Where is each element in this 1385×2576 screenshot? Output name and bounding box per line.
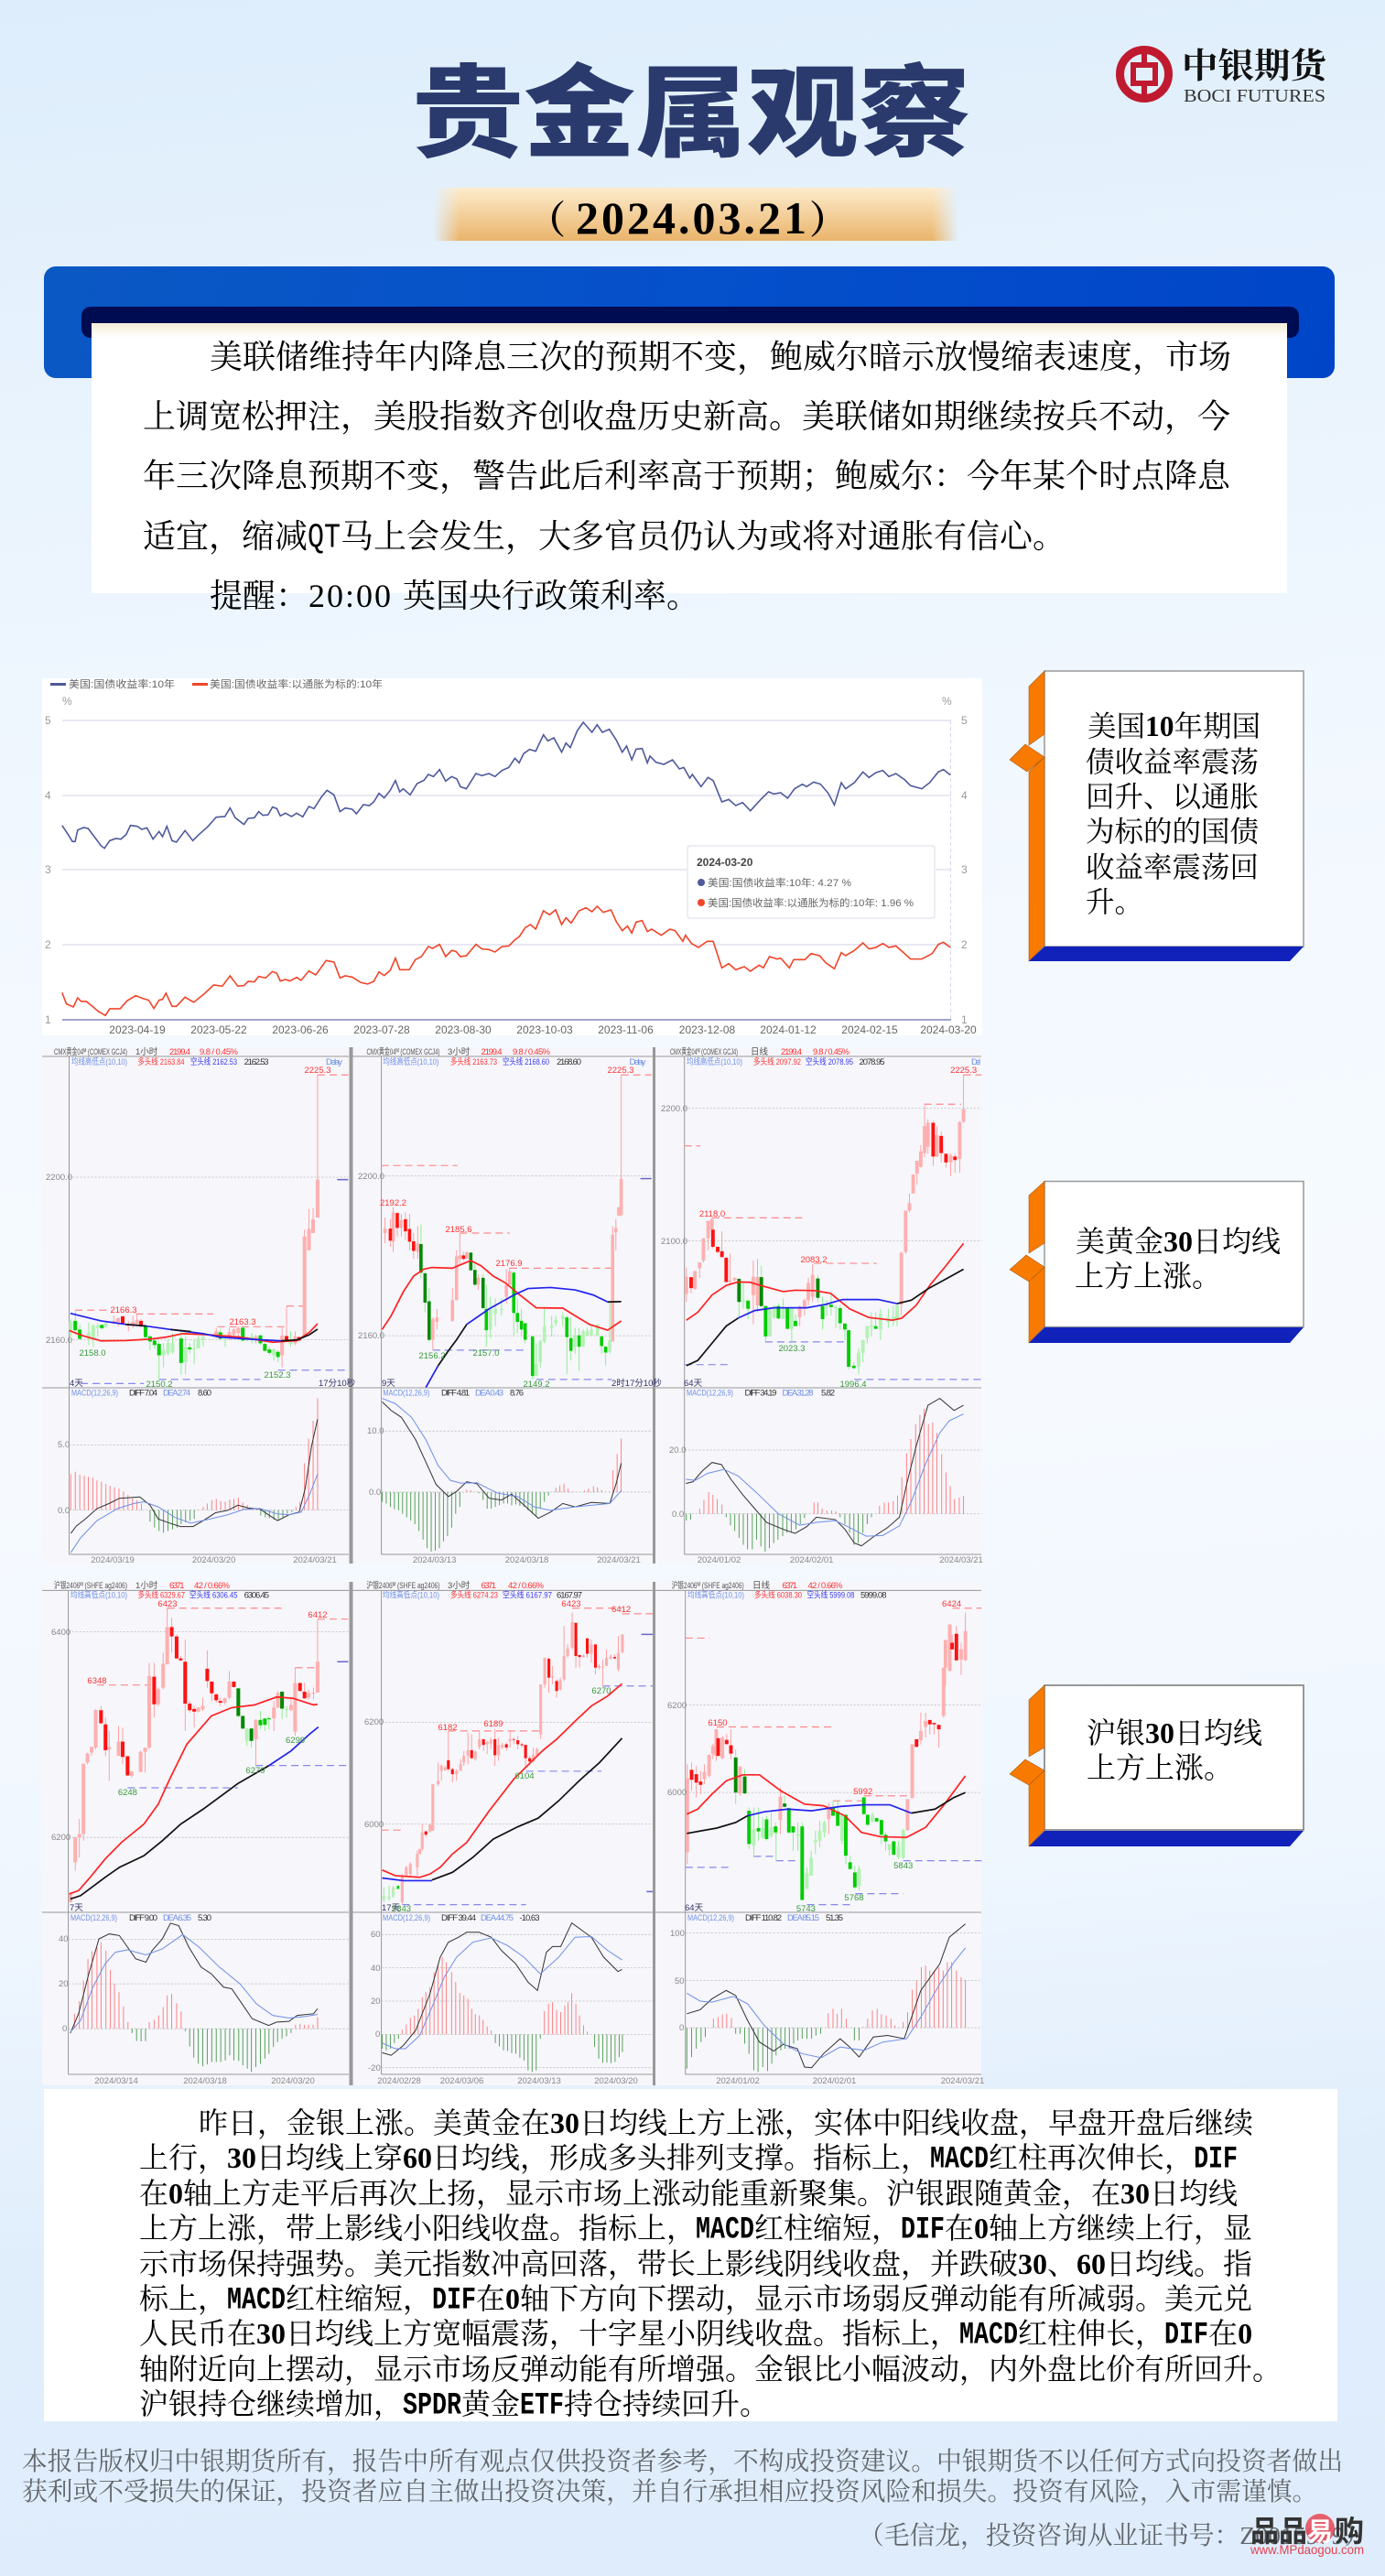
chart: gold 1 hour: 空头线 2162.53: [190, 1056, 237, 1067]
chart: gold 3 hour: 2024/03/18: [505, 1555, 548, 1565]
chart: gold 1 hour: 2024/03/19: [91, 1555, 135, 1565]
chart: gold 1 hour: 1小时: [135, 1046, 158, 1057]
chart: gold daily: DIFF 34.19: [745, 1388, 776, 1399]
summary text: 上调宽松押注，美股指数齐创收盘历史新高。美联储如期继续按兵不动，今: [143, 398, 1230, 435]
chart: gold daily: 5.82: [821, 1388, 835, 1399]
chart: silver 3 hour: [364, 1580, 653, 2086]
chart: gold 1 hour: 2200.0: [46, 1173, 72, 1183]
callout: gold: 美黄金30日均线: [1076, 1225, 1281, 1258]
summary text: 美联储维持年内降息三次的预期不变，鲍威尔暗示放慢缩表速度，市场: [210, 339, 1231, 375]
analysis text: MACD: [959, 2319, 1018, 2354]
chart: gold 3 hour: 2192.2: [380, 1198, 406, 1208]
chart: silver 3 hour: 3小时: [448, 1580, 471, 1591]
callout: silver: 沪银30日均线: [1087, 1716, 1262, 1749]
chart: gold 1 hour: 2160.0: [46, 1336, 72, 1346]
analysis text: DIF: [901, 2213, 945, 2248]
chart: gold 3 hour: MACD(12,26,9): [383, 1388, 429, 1399]
chart: gold 1 hour: 多头线 2163.84: [137, 1056, 185, 1067]
chart: gold daily: 2078.95: [859, 1057, 884, 1067]
chart: US treasury yields: 2024-03-20: [920, 1023, 977, 1036]
chart: silver daily: 6000: [667, 1788, 687, 1798]
chart: silver 1 hour: 沪银2406ᴹ (SHFE ag2406): [54, 1580, 127, 1591]
chart: US treasury yields: %: [942, 695, 952, 708]
chart: silver 3 hour: 6412: [611, 1605, 631, 1615]
chart: gold daily: 均线高低点(10,10): [687, 1056, 742, 1067]
chart: gold 3 hour: 2024/03/13: [413, 1555, 456, 1565]
chart: silver 3 hour: DEA 44.75: [481, 1913, 514, 1923]
chart: silver 1 hour: 2024/03/18: [183, 2076, 227, 2086]
chart row background: silver: [42, 1582, 981, 2085]
chart: gold daily: 2225.3: [950, 1066, 977, 1076]
chart: US treasury yields: [42, 677, 982, 1036]
paper panel: [92, 323, 1287, 593]
chart: silver daily: 64天: [685, 1903, 704, 1913]
chart: silver 3 hour: 空头线 6167.97: [503, 1589, 552, 1600]
chart: silver 1 hour: 多头线 6329.67: [137, 1589, 185, 1600]
chart: US treasury yields: 美国:国债收益率:10年: [69, 677, 175, 690]
chart: gold 3 hour: 2225.3: [607, 1066, 634, 1076]
chart: gold 3 hour: 10.0: [367, 1426, 384, 1436]
chart: silver 1 hour: 1小时: [135, 1580, 158, 1591]
chart: silver daily: MACD(12,26,9): [687, 1913, 734, 1923]
chart: gold 3 hour: 2168.60: [557, 1057, 581, 1067]
chart: US treasury yields: 5: [961, 714, 968, 727]
chart: gold 3 hour: [358, 1046, 662, 1565]
callout: silver: 上方上涨。: [1087, 1751, 1233, 1784]
chart: US treasury yields: 2: [961, 938, 968, 951]
chart: silver daily: 42 / 0.66%: [807, 1581, 843, 1591]
chart: silver daily: 5992: [853, 1787, 872, 1797]
chart: silver 3 hour: 40: [371, 1964, 381, 1974]
chart: silver 1 hour: DEA 6.35: [163, 1913, 191, 1923]
header band: [44, 266, 1335, 378]
chart: gold daily: 2118.0: [699, 1209, 725, 1219]
chart: silver 3 hour: 6104: [514, 1771, 535, 1781]
chart: gold daily: CMX黄金04ᴹ (COMEX GCJ4): [670, 1046, 738, 1057]
chart: silver daily: 6371: [782, 1581, 797, 1591]
chart: silver daily: [667, 1580, 984, 2086]
chart: silver 3 hour: 6423: [561, 1599, 581, 1609]
analysis text: DIF: [1164, 2319, 1208, 2354]
chart: gold 3 hour: Delay: [630, 1057, 646, 1067]
chart: gold 1 hour: CMX黄金04ᴹ (COMEX GCJ4): [54, 1046, 127, 1057]
chart: silver 3 hour: 2024/03/06: [440, 2076, 483, 2086]
chart: US treasury yields: 3: [45, 863, 51, 876]
watermark: [1250, 2514, 1364, 2557]
chart: gold daily: [661, 1046, 983, 1565]
chart: gold 3 hour: 空头线 2168.60: [503, 1056, 549, 1067]
chart: silver daily: 多头线 6038.30: [754, 1589, 802, 1600]
summary text: 适宜，缩减 马上会发生，大多官员仍认为或将对通胀有信心。: [143, 518, 1066, 555]
chart: gold 3 hour: 2156.2: [418, 1351, 446, 1361]
chart: gold daily: 0.0: [672, 1510, 684, 1520]
chart: gold daily: 9.8 / 0.45%: [813, 1047, 850, 1057]
chart: silver 3 hour: 2024/03/13: [517, 2076, 561, 2086]
chart: gold 3 hour: 2157.0: [472, 1348, 500, 1358]
chart: US treasury yields: 2023-10-03: [516, 1023, 573, 1036]
analysis text: MACD: [696, 2213, 754, 2248]
chart: silver 3 hour: 6182: [438, 1723, 458, 1733]
analysis text: 轴附近向上摆动，显示市场反弹动能有所增强。金银比小幅波动，内外盘比价有所回升。: [139, 2353, 1282, 2386]
chart: silver 3 hour: -10.63: [520, 1913, 540, 1923]
chart: silver 3 hour: 0: [375, 2029, 380, 2040]
callout: yields: 债收益率震荡: [1086, 746, 1259, 778]
chart: silver daily: 空头线 5999.08: [807, 1589, 855, 1600]
chart: silver 3 hour: 5843: [392, 1904, 411, 1914]
chart: US treasury yields: 5: [45, 714, 51, 727]
chart: gold 1 hour: 2152.3: [264, 1370, 291, 1380]
chart: gold 1 hour: 2199.4: [169, 1047, 190, 1057]
chart: silver 3 hour: 2024/02/28: [377, 2076, 421, 2086]
chart: gold 1 hour: 5.0: [58, 1440, 70, 1450]
chart: silver 3 hour: 均线高低点(10,10): [383, 1589, 439, 1600]
callout: gold: [1010, 1181, 1304, 1343]
chart: silver 3 hour: 6189: [483, 1719, 503, 1729]
disclaimer: 本报告版权归中银期货所有，报告中所有观点仅供投资者参考，不构成投资建议。中银期货不以任何方式向投资者做出: [22, 2448, 1343, 2476]
chart: silver 1 hour: 6306.45: [244, 1591, 269, 1600]
chart: gold 3 hour: 0.0: [369, 1488, 381, 1498]
analysis panel: [44, 2089, 1337, 2421]
chart: silver daily: 100: [670, 1929, 685, 1939]
chart: silver 3 hour: -20: [368, 2063, 381, 2073]
chart: gold 3 hour: 均线高低点(10,10): [383, 1056, 438, 1067]
chart: silver 1 hour: 6299: [286, 1736, 305, 1746]
chart: gold 3 hour: 多头线 2163.73: [450, 1056, 497, 1067]
analysis text: MACD: [930, 2143, 989, 2178]
chart: silver 3 hour: 6167.97: [557, 1591, 582, 1600]
chart: US treasury yields: 2023-05-22: [190, 1023, 247, 1036]
chart: silver 1 hour: 0: [62, 2024, 67, 2034]
chart: gold 3 hour: 2200.0: [358, 1172, 384, 1182]
chart: gold 1 hour: 2150.2: [146, 1380, 173, 1390]
chart: silver daily: 2024/01/02: [716, 2076, 760, 2086]
logo: BOCI Futures: BOCI FUTURES: [1184, 86, 1325, 106]
date text: （2024.03.21）: [527, 190, 848, 245]
chart: silver 3 hour: 多头线 6274.23: [450, 1589, 498, 1600]
chart: gold 1 hour: 2024/03/21: [293, 1555, 337, 1565]
summary text: [143, 339, 1231, 614]
callout: silver: [1010, 1685, 1304, 1846]
callout: yields: [1010, 671, 1304, 961]
chart: gold daily: 2083.2: [800, 1255, 828, 1265]
chart: silver 1 hour: 40: [59, 1934, 69, 1944]
callout: yields: 回升、以通胀: [1086, 781, 1259, 813]
watermark: 购: [1335, 2515, 1364, 2548]
chart: gold daily: 1996.4: [839, 1380, 867, 1390]
chart: silver daily: DIFF 110.82: [745, 1913, 782, 1923]
chart: silver 3 hour: 6270: [591, 1686, 611, 1696]
chart: gold 1 hour: 2024/03/20: [192, 1555, 235, 1565]
chart: US treasury yields: 2: [45, 938, 51, 951]
chart: silver daily: 6150: [708, 1718, 728, 1728]
chart: gold daily: 多头线 2097.92: [753, 1056, 801, 1067]
chart: gold 1 hour: 2166.3: [110, 1305, 137, 1315]
chart: gold 1 hour: 8.60: [198, 1388, 211, 1399]
analysis text: 上方上涨，带上影线小阳线收盘。指标上， 红柱缩短， 在0轴上方继续上行，显: [139, 2212, 1252, 2245]
chart: silver 3 hour: 42 / 0.66%: [508, 1581, 545, 1591]
chart: gold 1 hour: DIFF 7.04: [129, 1388, 157, 1399]
callout: yields: 升。: [1086, 886, 1143, 918]
analysis text: 昨日，金银上涨。美黄金在30日均线上方上涨，实体中阳线收盘，早盘开盘后继续: [199, 2106, 1253, 2139]
logo: BOCI Futures: [1116, 41, 1331, 106]
chart: gold daily: MACD(12,26,9): [687, 1388, 733, 1399]
chart: gold 3 hour: 8.76: [510, 1388, 524, 1399]
chart: gold 3 hour: 2185.6: [445, 1225, 472, 1235]
chart: gold 1 hour: 2225.3: [304, 1066, 331, 1076]
chart: silver 1 hour: MACD(12,26,9): [70, 1913, 117, 1923]
chart: silver daily: 5843: [893, 1861, 913, 1871]
tooltip: 美国:国债收益率:10年: 4.27 %: [708, 876, 851, 889]
chart: gold daily: 2024/01/02: [698, 1555, 741, 1565]
watermark: 品品: [1250, 2515, 1307, 2548]
chart: gold 1 hour: 2158.0: [79, 1348, 106, 1358]
tooltip: [687, 845, 936, 919]
chart: gold 3 hour: DEA 0.43: [475, 1388, 503, 1399]
chart: gold 1 hour: 4天: [70, 1379, 83, 1389]
chart: US treasury yields: 2024-01-12: [760, 1023, 817, 1036]
chart: gold 3 hour: 2160.0: [358, 1331, 384, 1341]
chart: silver 1 hour: DIFF 9.00: [129, 1913, 157, 1923]
chart: US treasury yields: 2023-12-08: [679, 1023, 736, 1036]
chart: silver daily: 51.35: [826, 1913, 843, 1923]
chart: silver 3 hour: 60: [371, 1930, 381, 1940]
chart: gold daily: 2023.3: [778, 1344, 806, 1354]
chart: gold 1 hour: [46, 1046, 356, 1565]
watermark: www.MPdaogou.com: [1250, 2542, 1364, 2557]
analysis text: DIF: [1194, 2143, 1238, 2178]
chart: gold 3 hour: CMX黄金04ᴹ (COMEX GCJ4): [366, 1046, 439, 1057]
chart: gold daily: Del: [971, 1057, 980, 1067]
chart: gold 3 hour: 2149.2: [523, 1380, 550, 1390]
date banner: [433, 188, 958, 241]
chart: silver daily: 6424: [942, 1599, 961, 1609]
chart: US treasury yields: 2023-04-19: [109, 1023, 166, 1036]
chart: silver 1 hour: 7天: [70, 1903, 83, 1913]
chart: gold daily: 20.0: [669, 1445, 687, 1456]
chart: silver 1 hour: 6348: [87, 1676, 107, 1686]
chart: silver daily: 5768: [844, 1893, 864, 1903]
chart: silver daily: 50: [675, 1976, 685, 1986]
chart: silver 3 hour: 6371: [482, 1581, 496, 1591]
chart: silver daily: 5743: [796, 1904, 816, 1914]
analysis text: DIF: [432, 2284, 476, 2319]
chart: US treasury yields: 1: [961, 1013, 968, 1026]
analysis text: [139, 2106, 1282, 2424]
author line: （毛信龙，投资咨询从业证书号：Z0015979）: [859, 2522, 1369, 2550]
chart: US treasury yields: 2023-08-30: [435, 1023, 492, 1036]
title: 贵金属观察: [412, 32, 970, 178]
chart: silver 1 hour: 空头线 6306.45: [189, 1589, 238, 1600]
chart: silver 3 hour: 2024/03/20: [594, 2076, 638, 2086]
summary text: 提醒：20:00 英国央行政策利率。: [210, 578, 699, 614]
chart: silver daily: 2024/03/21: [941, 2076, 984, 2086]
chart: gold 1 hour: 均线高低点(10,10): [71, 1056, 127, 1067]
chart: gold 1 hour: 0.0: [58, 1506, 70, 1516]
chart: silver daily: 2024/02/01: [813, 2076, 856, 2086]
summary text: QT: [308, 519, 341, 558]
chart: silver 1 hour: 20: [59, 1979, 69, 1989]
chart: silver 1 hour: 6200: [51, 1833, 70, 1843]
chart: silver daily: 日线: [752, 1580, 771, 1591]
summary text: 年三次降息预期不变，警告此后利率高于预期；鲍威尔：今年某个时点降息: [143, 458, 1230, 494]
chart: silver 1 hour: 6400: [51, 1628, 70, 1638]
callout: yields: 收益率震荡回: [1086, 851, 1259, 883]
chart: US treasury yields: %: [62, 695, 72, 708]
disclaimer: [22, 2448, 1343, 2506]
chart: US treasury yields: 3: [961, 863, 968, 876]
chart: gold daily: 2200.0: [661, 1104, 687, 1114]
chart: silver 1 hour: 2024/03/20: [271, 2076, 315, 2086]
chart: gold daily: 64天: [684, 1379, 703, 1389]
chart: silver 1 hour: 6412: [308, 1610, 328, 1620]
chart: silver daily: 沪银2406ᴹ (SHFE ag2406): [672, 1580, 744, 1591]
chart: silver 3 hour: 6000: [364, 1820, 384, 1830]
chart: silver 1 hour: 6279: [245, 1766, 265, 1776]
chart: US treasury yields: 2023-11-06: [598, 1023, 654, 1036]
analysis text: 示市场保持强势。美元指数冲高回落，带长上影线阴线收盘，并跌破30、60日均线。指: [139, 2247, 1252, 2280]
chart: silver 1 hour: 5.30: [198, 1913, 211, 1923]
chart: gold 1 hour: 17分10秒: [319, 1378, 356, 1389]
chart: US treasury yields: 2023-06-26: [272, 1023, 329, 1036]
chart: US treasury yields: 1: [45, 1013, 51, 1026]
chart: silver 1 hour: 均线高低点(10,10): [70, 1589, 127, 1600]
analysis text: SPDR: [403, 2389, 461, 2424]
chart: gold 1 hour: 2163.3: [229, 1317, 256, 1327]
chart: silver 1 hour: 6371: [169, 1581, 185, 1591]
callout: gold: 上方上涨。: [1075, 1260, 1221, 1293]
chart: gold daily: 2199.4: [781, 1047, 802, 1057]
chart: silver 3 hour: 20: [371, 1997, 381, 2007]
chart: gold daily: 日线: [751, 1046, 769, 1057]
chart: silver 3 hour: 6200: [364, 1717, 384, 1727]
chart: US treasury yields: 2024-02-15: [841, 1023, 898, 1036]
chart: gold 3 hour: 2199.4: [482, 1047, 502, 1057]
chart: silver 3 hour: DIFF 39.44: [441, 1913, 476, 1923]
chart: gold 1 hour: DEA 2.74: [163, 1388, 190, 1399]
analysis text: ETF: [520, 2389, 564, 2424]
chart: silver 1 hour: 6248: [118, 1788, 137, 1798]
analysis text: 在0轴上方走平后再次上扬，显示市场上涨动能重新聚集。沪银跟随黄金，在30日均线: [139, 2177, 1238, 2210]
chart: US treasury yields: 2023-07-28: [353, 1023, 410, 1036]
chart: silver daily: DEA 85.15: [787, 1913, 819, 1923]
chart: gold 1 hour: 2162.53: [244, 1057, 269, 1067]
chart: silver 3 hour: MACD(12,26,9): [383, 1913, 430, 1923]
chart: gold 3 hour: 9.8 / 0.45%: [513, 1047, 551, 1057]
chart: silver 1 hour: 42 / 0.66%: [194, 1581, 231, 1591]
chart: gold 1 hour: MACD(12,26,9): [71, 1388, 118, 1399]
chart: gold 3 hour: 2176.9: [495, 1259, 523, 1269]
chart: silver daily: 6200: [667, 1701, 687, 1711]
disclaimer: 获利或不受损失的保证，投资者应自主做出投资决策，并自行承担相应投资风险和损失。投资有风险，入市需谨慎。: [22, 2478, 1317, 2506]
chart: gold daily: 2100.0: [661, 1237, 687, 1247]
chart: gold 3 hour: 9天: [382, 1379, 395, 1389]
chart: gold daily: 空头线 2078.95: [806, 1056, 853, 1067]
chart: silver 1 hour: 2024/03/14: [94, 2076, 138, 2086]
analysis text: 上行，30日均线上穿60日均线，形成多头排列支撑。指标上， 红柱再次伸长，: [139, 2141, 1194, 2174]
callout: yields: 为标的的国债: [1086, 816, 1259, 848]
chart: silver 3 hour: 沪银2406ᴹ (SHFE ag2406): [366, 1580, 439, 1591]
tooltip: 2024-03-20: [697, 856, 753, 869]
chart: silver daily: 5999.08: [860, 1591, 886, 1600]
chart: gold 1 hour: 9.8 / 0.45%: [200, 1047, 239, 1057]
chart: silver 3 hour: 17天: [382, 1903, 401, 1913]
analysis text: MACD: [227, 2284, 286, 2319]
analysis text: 沪银持仓继续增加， 黄金 持仓持续回升。: [139, 2387, 769, 2420]
chart: gold daily: 2024/02/01: [790, 1555, 833, 1565]
chart row background: gold: [42, 1047, 981, 1564]
analysis text: 标上， 红柱缩短， 在0轴下方向下摆动，显示市场弱反弹动能有所减弱。美元兑: [139, 2282, 1252, 2315]
chart: gold 3 hour: 3小时: [448, 1046, 471, 1057]
chart: gold daily: 2024/03/21: [939, 1555, 983, 1565]
chart: US treasury yields: 4: [961, 789, 968, 802]
callout: yields: 美国10年期国: [1087, 710, 1261, 742]
chart: silver 1 hour: [51, 1580, 348, 2086]
watermark: 易: [1307, 2517, 1333, 2546]
chart: gold 1 hour: Delay: [326, 1057, 342, 1067]
chart: US treasury yields: 美国:国债收益率:以通胀为标的:10年: [210, 677, 383, 690]
chart: gold 3 hour: DIFF 4.81: [441, 1388, 470, 1399]
tooltip: 美国:国债收益率:以通胀为标的:10年: 1.96 %: [708, 896, 914, 909]
chart: gold daily: DEA 31.28: [782, 1388, 813, 1399]
chart: silver daily: 均线高低点(10,10): [687, 1589, 744, 1600]
chart: gold 3 hour: 2时17分10秒: [611, 1378, 662, 1389]
analysis text: 人民币在30日均线上方宽幅震荡，十字星小阴线收盘。指标上， 红柱伸长， 在0: [139, 2317, 1252, 2350]
chart: silver 1 hour: 6423: [157, 1599, 178, 1609]
chart: US treasury yields: 4: [45, 789, 51, 802]
chart: gold 3 hour: 2024/03/21: [597, 1555, 641, 1565]
chart: silver daily: 0: [679, 2023, 684, 2033]
